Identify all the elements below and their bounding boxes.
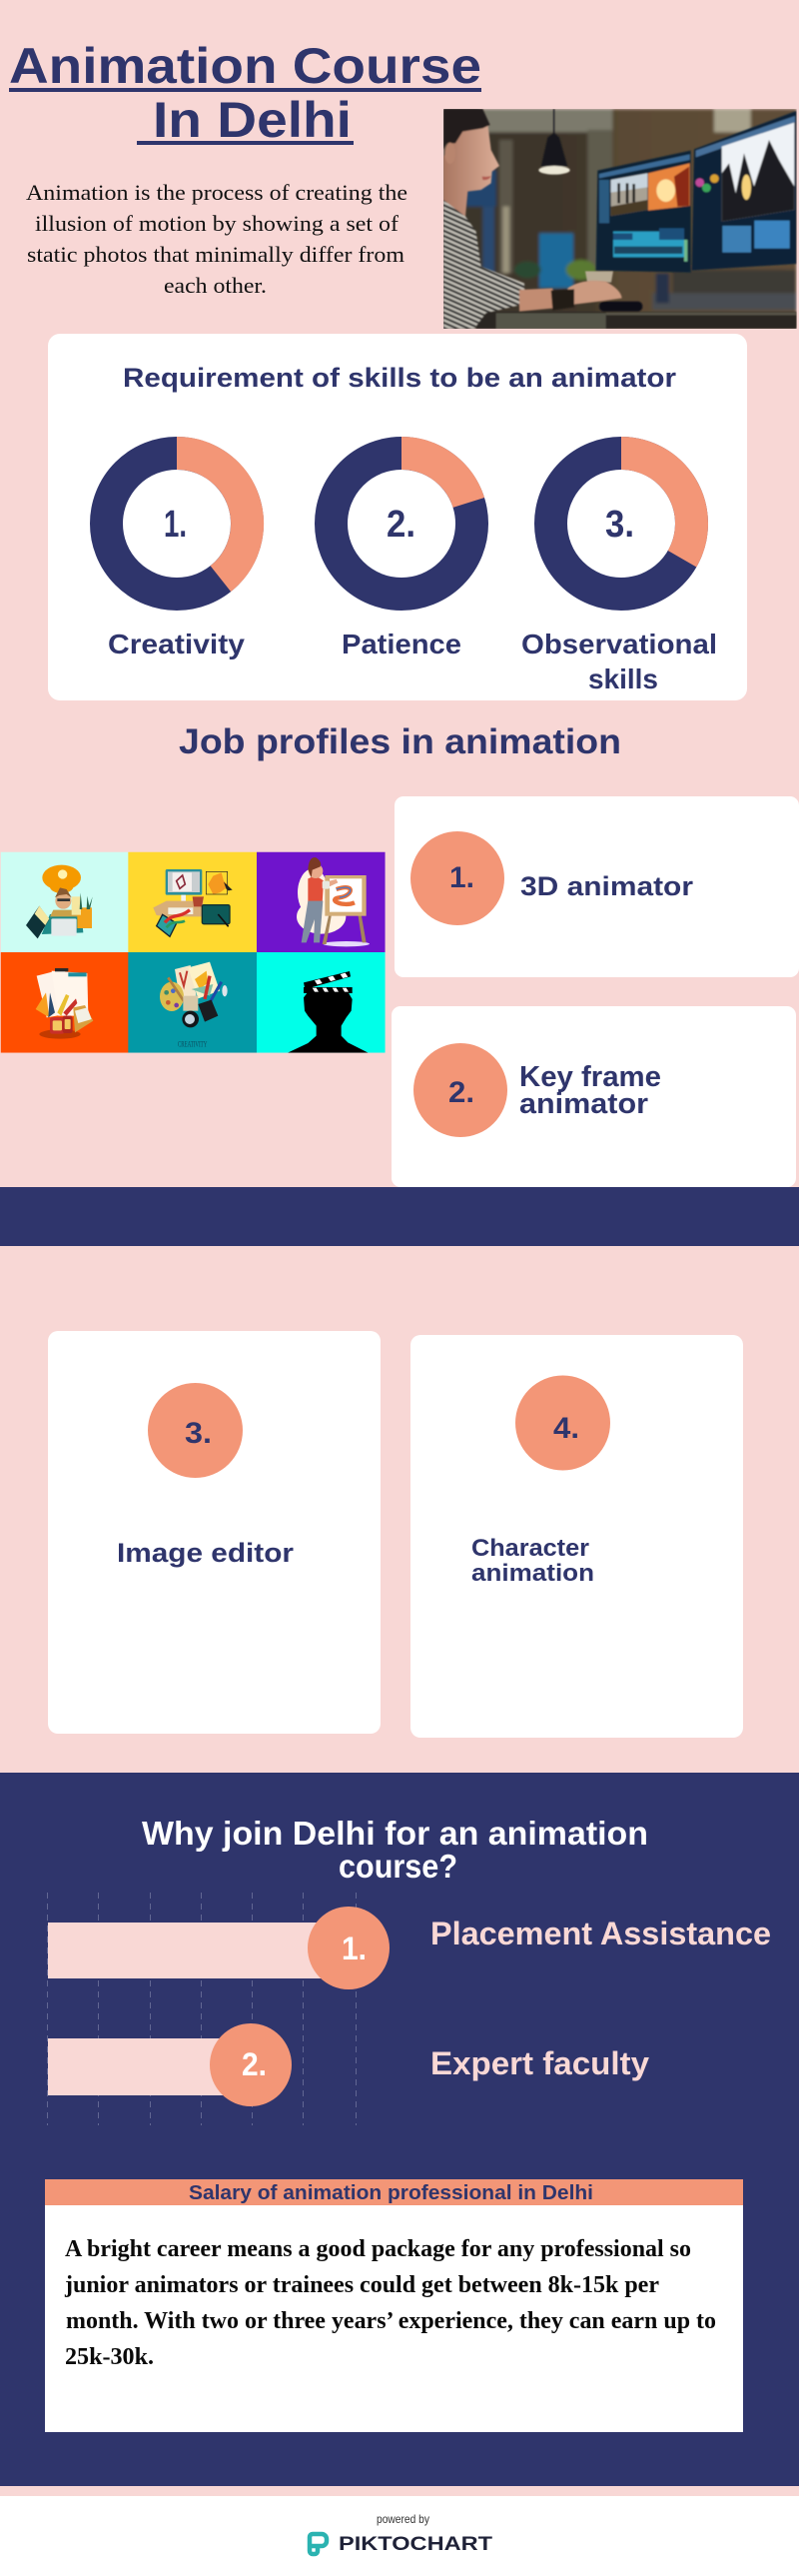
- donut 1: creativity: 1.: [164, 504, 187, 546]
- illustration: head silhouette with clapperboard: [288, 971, 369, 1053]
- image collage: animation themes: [1, 852, 386, 1053]
- salary body text: 25k-30k.: [65, 2344, 154, 2370]
- donut 1: creativity: [106, 454, 248, 594]
- intro paragraph: static photos that minimally differ from: [27, 242, 404, 267]
- logo: Piktochart: PIKTOCHART: [339, 2533, 492, 2555]
- donut labels: Observational: [521, 629, 717, 659]
- job card 2: key frame animator: [392, 1006, 796, 1187]
- illustration: art supplies on orange: [36, 968, 93, 1039]
- number badge 4: [515, 1375, 610, 1471]
- powered by text: powered by: [377, 2512, 429, 2526]
- intro paragraph: illusion of motion by showing a set of: [35, 211, 400, 236]
- donut 2: patience: [332, 453, 471, 594]
- number badge 3: 3.: [185, 1417, 212, 1450]
- panel: skills card: [48, 334, 747, 700]
- salary body text: [64, 2236, 716, 2370]
- lamp: [538, 109, 570, 175]
- donut labels: Creativity: [108, 629, 245, 659]
- job title: animation: [471, 1560, 594, 1587]
- illustration: designer with idea: [26, 865, 93, 938]
- illustration: digital art desk: [153, 869, 233, 936]
- job card 1: 3D animator: [395, 796, 799, 977]
- salary box: [45, 2179, 743, 2432]
- job title: [519, 1061, 661, 1120]
- why join heading: Why join Delhi for an animation: [142, 1815, 648, 1852]
- intro paragraph: each other.: [164, 273, 267, 298]
- donut labels: skills: [588, 663, 658, 694]
- footer strip: [0, 2496, 799, 2576]
- donut labels: Patience: [342, 629, 461, 659]
- job title: Image editor: [117, 1538, 295, 1568]
- job title: 3D animator: [520, 871, 694, 901]
- small caption in tile: CREATIVITY: [178, 1038, 208, 1048]
- number badge 1: 1.: [449, 861, 474, 894]
- bar 1: placement assistance: [48, 1907, 390, 1989]
- job profiles heading: Job profiles in animation: [179, 722, 621, 761]
- job title: Character: [471, 1535, 589, 1562]
- number badge 2: 2.: [448, 1076, 474, 1109]
- intro paragraph: Animation is the process of creating the: [26, 180, 407, 205]
- monitors: [596, 111, 796, 273]
- navy band: [0, 1187, 799, 1246]
- logo: Piktochart: [310, 2533, 492, 2555]
- photo: animator at dual monitors: [443, 109, 797, 329]
- job card 3: image editor: [48, 1331, 381, 1734]
- number badge 2: [413, 1043, 507, 1137]
- intro paragraph: [26, 180, 407, 298]
- why join heading: [142, 1815, 648, 1885]
- donut labels: [108, 629, 717, 694]
- bar 1 label: Placement Assistance: [430, 1916, 771, 1951]
- job card 4: character animation: [410, 1335, 743, 1738]
- bar 2: expert faculty: 2.: [242, 2046, 267, 2082]
- title: Animation Course: [9, 38, 481, 94]
- salary body text: junior animators or trainees could get between 8k-15k per: [64, 2272, 659, 2298]
- job title: Key frame: [519, 1061, 661, 1093]
- skills heading: Requirement of skills to be an animator: [123, 363, 677, 393]
- woman: [443, 109, 642, 329]
- salary body text: month. With two or three years’ experience, they can earn up to: [66, 2308, 716, 2334]
- bar 2: expert faculty: [48, 2023, 292, 2106]
- navy background: [0, 1773, 799, 2486]
- salary heading: Salary of animation professional in Delhi: [189, 2182, 593, 2204]
- number badge 4: 4.: [553, 1412, 579, 1445]
- job title: [471, 1535, 594, 1587]
- bar 2 label: Expert faculty: [430, 2045, 649, 2081]
- title: In Delhi: [153, 92, 352, 148]
- title: [9, 38, 481, 148]
- panel: why join Delhi: [0, 1773, 799, 2486]
- donut 2: patience: 2.: [387, 504, 415, 546]
- coffee cup: [585, 271, 613, 283]
- card background: [48, 334, 747, 700]
- number badge 1: [410, 831, 504, 925]
- why join heading: course?: [339, 1848, 457, 1885]
- bar 1: placement assistance: 1.: [342, 1931, 367, 1966]
- job title: animator: [519, 1088, 648, 1120]
- donut 3: observational skills: 3.: [605, 504, 634, 546]
- salary body text: A bright career means a good package for any professional so: [65, 2236, 691, 2262]
- donut 3: observational skills: [551, 454, 691, 594]
- number badge 3: [148, 1383, 243, 1478]
- illustration: creativity tools: [160, 962, 228, 1048]
- desk: [476, 312, 797, 329]
- illustration: painter at easel: [297, 857, 370, 946]
